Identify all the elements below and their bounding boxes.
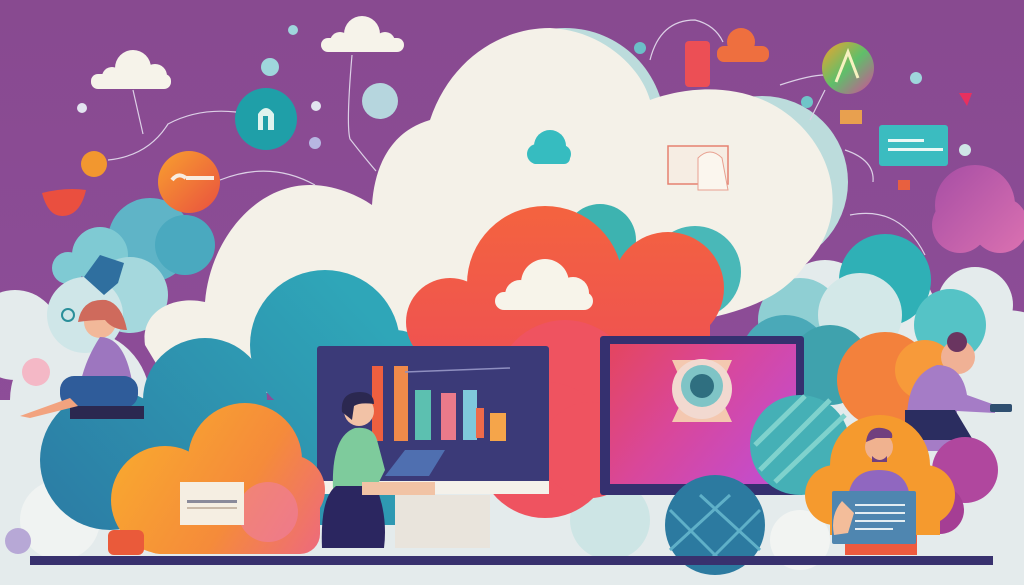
- red cylinder icon: [685, 41, 710, 87]
- red half bowl: [42, 189, 86, 216]
- large white cloud shadow: [465, 28, 848, 268]
- pale blue blobs: [77, 25, 398, 149]
- teal cloud behind red: [564, 204, 741, 318]
- orange cloud right with person: [837, 332, 955, 428]
- small orange ball: [81, 151, 107, 177]
- small teal cloud icon: [527, 130, 571, 164]
- chart bars: [372, 366, 506, 441]
- red cloud lower lobe: [477, 320, 638, 518]
- orange cloud icon top: [717, 28, 769, 62]
- connector lines: [108, 20, 925, 255]
- small dots top right: [634, 42, 972, 190]
- person with beard: [849, 428, 909, 492]
- upper-left teal cloud: [47, 198, 215, 353]
- white cloud on red: [495, 259, 593, 310]
- bottom lilac dot: [5, 528, 31, 554]
- blue diamond icon left: [84, 255, 124, 295]
- teal message card: [879, 125, 948, 166]
- person reading left: [20, 300, 144, 419]
- blue teal cloud: [40, 270, 435, 530]
- red base of bottom right cloud: [845, 535, 917, 555]
- monitor: bar chart: [317, 346, 549, 494]
- laptop card: [832, 491, 916, 544]
- pale background clouds: [0, 260, 1024, 585]
- upper-right teal cloud: [740, 234, 986, 405]
- teal lock orb: [235, 88, 297, 150]
- rainbow orb: [822, 42, 874, 94]
- orange cloud bottom right: [805, 415, 955, 535]
- person at chart monitor: [322, 392, 490, 548]
- magenta cloud bottom right: [916, 437, 998, 534]
- top white cloud: [321, 16, 404, 52]
- orange orb with link icon: [158, 151, 220, 213]
- pink swirl on orange cloud: [238, 482, 298, 542]
- diamond patterned orb at bottom: [665, 475, 765, 575]
- monitor: pink screen: [600, 336, 804, 495]
- pink swirl cloud right: [932, 165, 1024, 253]
- large white cloud: [145, 28, 833, 400]
- red cloud: [406, 206, 724, 366]
- baseline bar: [30, 556, 993, 565]
- red base at bottom left: [108, 530, 144, 555]
- left white cloud: [91, 50, 171, 89]
- card on orange cloud: [180, 482, 244, 525]
- orange cloud bottom left: [111, 403, 325, 554]
- document icon on white cloud: [668, 146, 728, 190]
- teal striped globe: [750, 395, 850, 495]
- person with phone right: [905, 332, 1012, 451]
